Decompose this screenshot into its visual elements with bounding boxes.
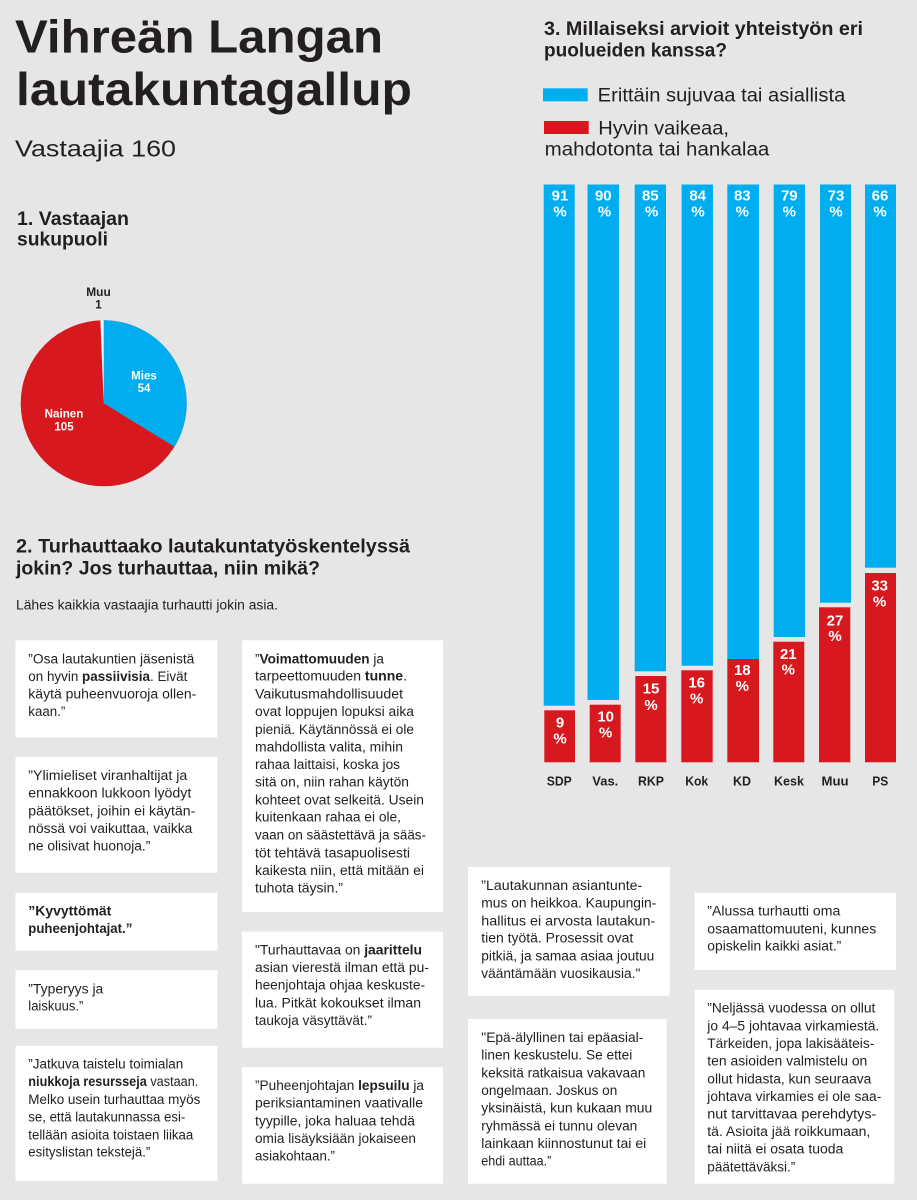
bar: Vas.: % xyxy=(598,204,611,221)
quote card: passiivisia: on hyvin passiivisia. Eivät xyxy=(28,669,188,684)
bar: PS: 33 xyxy=(871,578,888,595)
quote card: virkamiehet: johtava virkamies ei ole saa- xyxy=(706,1089,881,1104)
bar: Kok: 84 xyxy=(689,187,707,204)
quote card: voimattomuus: rahaa laittaisi, koska jos xyxy=(255,757,400,772)
quote card: lepsuilu: ”Puheenjohtajan lepsuilu ja xyxy=(255,1078,424,1093)
quote card: voimattomuus: ovat loppujen lopuksi aika xyxy=(255,704,415,719)
quote card: keskustelu: ryhmässä ei tunnu olevan xyxy=(481,1118,637,1133)
bar: Vas.: 90 xyxy=(595,187,612,204)
title: lautakuntagallup xyxy=(16,63,412,115)
quote card: voimattomuus: sitä on, niin rahan käytön xyxy=(255,775,409,790)
title xyxy=(15,10,412,115)
quote card: keskustelu: lainkaan kiinnostunut tai ei xyxy=(481,1136,646,1151)
bar: Muu: % xyxy=(828,628,842,645)
bar: KD: % xyxy=(736,204,749,221)
quote card: voimattomuus xyxy=(242,640,443,912)
quote card: voimattomuus: tuhota täysin.” xyxy=(255,880,343,895)
quote card: resurssit: ”Jatkuva taistelu toimialan xyxy=(28,1056,183,1071)
quote card: voimattomuus: mahdollista valita, mihin xyxy=(255,740,403,755)
quote card: osaamattomuus: opiskelin kaikki asiat.” xyxy=(707,939,841,954)
heading: question 1 xyxy=(17,209,129,251)
quote card: resurssit: Melko usein turhauttaa myös xyxy=(28,1092,201,1107)
bar: KD: 83 xyxy=(734,187,751,204)
quote card: virkamiehet: nut tarvittavaa perehdytys- xyxy=(707,1107,876,1122)
bar: RKP: % xyxy=(645,204,658,221)
quote card: virkamiehet: Tärkeiden, jopa lakisääteis- xyxy=(707,1036,874,1051)
quote card: virkamiehet: ollut hidasta, kun seuraava xyxy=(707,1071,872,1086)
quote card: viranhaltijat: ennakkoon lukkoon lyödyt xyxy=(28,786,192,801)
quote card: asiantuntemus: hallitus ei arvosta lautakun- xyxy=(481,913,655,928)
quote card: passiivisia: ”Osa lautakuntien jäsenistä xyxy=(28,651,195,666)
bar: Vas.: % xyxy=(599,725,612,742)
bar: KD: % xyxy=(736,678,749,695)
quote card: typeryys: ”Typeryys ja xyxy=(28,981,104,996)
quote card: lepsuilu: tyypille, joka haluaa tehdä xyxy=(255,1113,416,1128)
bar: Muu: 27 xyxy=(827,612,843,629)
bar: KD xyxy=(727,184,759,789)
bar: Vas. xyxy=(588,184,621,789)
bar: PS: 66 xyxy=(872,187,888,204)
quote card: keskustelu: linen keskustelu. Se ettei xyxy=(481,1048,632,1063)
quote card: voimattomuus: tarpeettomuuden tunne. xyxy=(255,669,407,684)
bar: RKP: 85 xyxy=(642,187,659,204)
quote card: passiivisia xyxy=(16,640,218,737)
quote card: keskustelu: ongelmaan. Joskus on xyxy=(481,1083,617,1098)
quote card: asiantuntemus: vääntämään vuosikausia." xyxy=(481,966,641,981)
quote card: osaamattomuus: osaamattomuuteni, kunnes xyxy=(707,921,877,936)
quote card: voimattomuus: pieniä. Käytännössä ei ole xyxy=(255,722,414,737)
heading: question 3: 3. Millaiseksi arvioit yhteistyön eri xyxy=(544,19,863,40)
quote card: keskustelu: yksinäistä, kun kukaan muu xyxy=(481,1101,652,1116)
quote card: asiantuntemus: pitkiä, ja samaa asiaa joutuu xyxy=(481,948,654,963)
quote card: lepsuilu: periksiantaminen vaativalle xyxy=(255,1096,423,1111)
quote card: virkamiehet: ”Neljässä vuodessa on ollut xyxy=(707,1001,876,1016)
stacked bar chart: cooperation by party xyxy=(544,184,896,789)
quote card: puheenjohtajat: puheenjohtajat.” xyxy=(28,921,132,936)
quote card: lepsuilu: omia lisäyksiään jokaiseen xyxy=(255,1131,416,1146)
quote card: voimattomuus: kaikesta niin, että mitään ei xyxy=(255,863,424,878)
quote card: keskustelu xyxy=(468,1019,667,1184)
quote card: jaarittelu: lua. Pitkät kokoukset ilman xyxy=(255,995,421,1010)
heading: question 1: 1. Vastaajan xyxy=(17,209,129,230)
quote card: keskustelu: keksitä ratkaisua vakavaan xyxy=(481,1065,645,1080)
bar: RKP xyxy=(635,184,666,789)
quote card: asiantuntemus: mus on heikkoa. Kaupungin- xyxy=(481,896,656,911)
quote card: asiantuntemus xyxy=(468,867,670,996)
heading: question 3: puolueiden kanssa? xyxy=(544,41,727,62)
bar: Kok: 16 xyxy=(688,675,705,692)
quote card: keskustelu: ehdi auttaa.” xyxy=(481,1154,551,1169)
heading: question 2: 2. Turhauttaako lautakuntatyöskentelyssä xyxy=(16,536,410,557)
legend: Erittäin sujuvaa tai asiallista xyxy=(598,85,846,106)
heading: question 2: jokin? Jos turhauttaa, niin mikä? xyxy=(15,558,320,579)
quote card: jaarittelu: "Turhauttavaa on jaarittelu xyxy=(255,942,422,957)
quote card: virkamiehet: päätettäväksi.” xyxy=(707,1159,795,1174)
quote card: typeryys: laiskuus.” xyxy=(28,999,83,1014)
bar: KD: 18 xyxy=(734,662,751,679)
pie chart: gender: Mies xyxy=(131,370,157,382)
pie chart: gender xyxy=(21,287,187,486)
quote card: virkamiehet: tä. Asioita jää roikkumaan, xyxy=(707,1124,870,1139)
quote card: virkamiehet: jo 4–5 johtavaa virkamiestä. xyxy=(706,1018,879,1033)
quote card: jaarittelu: asian vierestä ilman että pu- xyxy=(255,960,429,975)
bar: SDP: SDP xyxy=(547,775,572,789)
quote card: puheenjohtajat xyxy=(16,893,218,951)
quote card: keskustelu: "Epä-älyllinen tai epäasial- xyxy=(481,1030,643,1045)
quote card: asiantuntemus: ”Lautakunnan asiantunte- xyxy=(481,878,642,893)
quote card: asiantuntemus: tien työtä. Prosessit ovat xyxy=(481,931,634,946)
bar: RKP: 15 xyxy=(643,681,659,698)
quote card: voimattomuus: kuitenkaan rahaa ei ole, xyxy=(255,810,401,825)
bar: Muu: % xyxy=(829,204,843,221)
quote card: passiivisia: käytä puheenvuoroja ollen- xyxy=(28,687,196,702)
quote card: virkamiehet: ten asioiden valmistelu on xyxy=(707,1054,867,1069)
quote card: lepsuilu xyxy=(242,1067,443,1184)
heading: question 2 xyxy=(15,536,410,579)
quote card: jaarittelu: taukoja väsyttävät.” xyxy=(255,1013,372,1028)
quote card: viranhaltijat xyxy=(16,757,218,873)
bar: Kesk: 79 xyxy=(781,187,798,204)
quote card: osaamattomuus xyxy=(695,893,896,970)
pie chart: gender: 1 xyxy=(95,300,102,312)
quote card: resurssit: niukkoja resursseja vastaan. xyxy=(28,1074,198,1089)
quote card: resurssit xyxy=(16,1046,218,1181)
bar: Muu: Muu xyxy=(822,775,848,789)
bar: SDP: % xyxy=(553,730,567,747)
quote card: viranhaltijat: nössä voi vaikuttaa, vaikka xyxy=(28,821,193,836)
quote card: viranhaltijat: ”Ylimieliset viranhaltijat ja xyxy=(28,768,188,783)
bar: RKP: RKP xyxy=(638,775,664,789)
quote card: virkamiehet xyxy=(695,990,894,1184)
quote card: virkamiehet: tai niitä ei osata tuoda xyxy=(707,1142,844,1157)
quote card: voimattomuus: ”Voimattomuuden ja xyxy=(255,651,384,666)
bar: SDP xyxy=(544,184,575,789)
bar: Kok xyxy=(681,184,713,789)
quote card: resurssit: se, että lautakunnassa esi- xyxy=(28,1110,185,1125)
subtitle: respondents: Vastaajia 160 xyxy=(15,136,176,162)
pie chart: gender: Muu xyxy=(86,287,111,299)
bar: PS: % xyxy=(873,593,886,610)
bar: Kesk: Kesk xyxy=(774,775,804,789)
bar: Kesk: % xyxy=(782,662,795,679)
legend: Hyvin vaikeaa, xyxy=(598,118,729,139)
quote card: resurssit: tellään asioita toistaen liikaa xyxy=(28,1127,194,1142)
bar: KD: KD xyxy=(733,775,751,789)
bar: RKP: % xyxy=(644,697,658,714)
quote card: passiivisia: kaan.” xyxy=(28,704,65,719)
bar: Muu xyxy=(819,184,851,789)
quote card: viranhaltijat: päätökset, joihin ei käytän- xyxy=(28,803,195,818)
bar: SDP: 91 xyxy=(552,187,568,204)
quote card: lepsuilu: asiakohtaan.” xyxy=(255,1149,335,1164)
bar: Kesk: 21 xyxy=(780,646,797,663)
bar: Kesk: % xyxy=(783,204,796,221)
bar: Kok: Kok xyxy=(685,775,708,789)
bar: Kok: % xyxy=(691,204,705,221)
legend xyxy=(543,85,846,160)
quote card: resurssit: esityslistan tekstejä.” xyxy=(28,1145,150,1160)
bar: Vas.: 10 xyxy=(597,709,614,726)
title: Vihreän Langan xyxy=(15,10,383,62)
bar: Muu: 73 xyxy=(828,187,844,204)
pie chart: gender: 105 xyxy=(54,421,74,433)
pie chart: gender: Nainen xyxy=(45,409,83,421)
heading: question 3 xyxy=(544,19,863,62)
bar: Kok: % xyxy=(690,691,703,708)
quote card: jaarittelu xyxy=(242,932,443,1048)
bar: Kesk xyxy=(773,184,805,789)
quote card: osaamattomuus: ”Alussa turhautti oma xyxy=(707,904,841,919)
bar: Vas.: Vas. xyxy=(592,775,618,789)
bar: PS: % xyxy=(873,204,887,221)
quote card: typeryys xyxy=(16,970,218,1029)
bar: PS: PS xyxy=(872,775,888,789)
bar: SDP: % xyxy=(553,204,567,221)
quote card: voimattomuus: Vaikutusmahdollisuudet xyxy=(255,687,403,702)
quote card: jaarittelu: heenjohtaja ohjaa keskuste- xyxy=(255,978,425,993)
bar: PS xyxy=(865,184,896,789)
quote card: voimattomuus: töt tehtävä tasapuolisesti xyxy=(255,845,410,860)
quote card: viranhaltijat: ne olisivat huonoja.” xyxy=(28,839,150,854)
quote card: puheenjohtajat: ”Kyvyttömät xyxy=(28,903,112,918)
heading: question 1: sukupuoli xyxy=(17,230,108,251)
quote card: voimattomuus: vaan on säästettävä ja sääs- xyxy=(255,828,426,843)
bar: SDP: 9 xyxy=(556,715,564,732)
pie chart: gender: 54 xyxy=(138,383,151,395)
quote card: voimattomuus: kohteet ovat selkeitä. Usein xyxy=(255,792,424,807)
legend: mahdotonta tai hankalaa xyxy=(545,139,770,160)
intro text: question 2: Lähes kaikkia vastaajia turhautti jokin asia. xyxy=(16,597,278,612)
